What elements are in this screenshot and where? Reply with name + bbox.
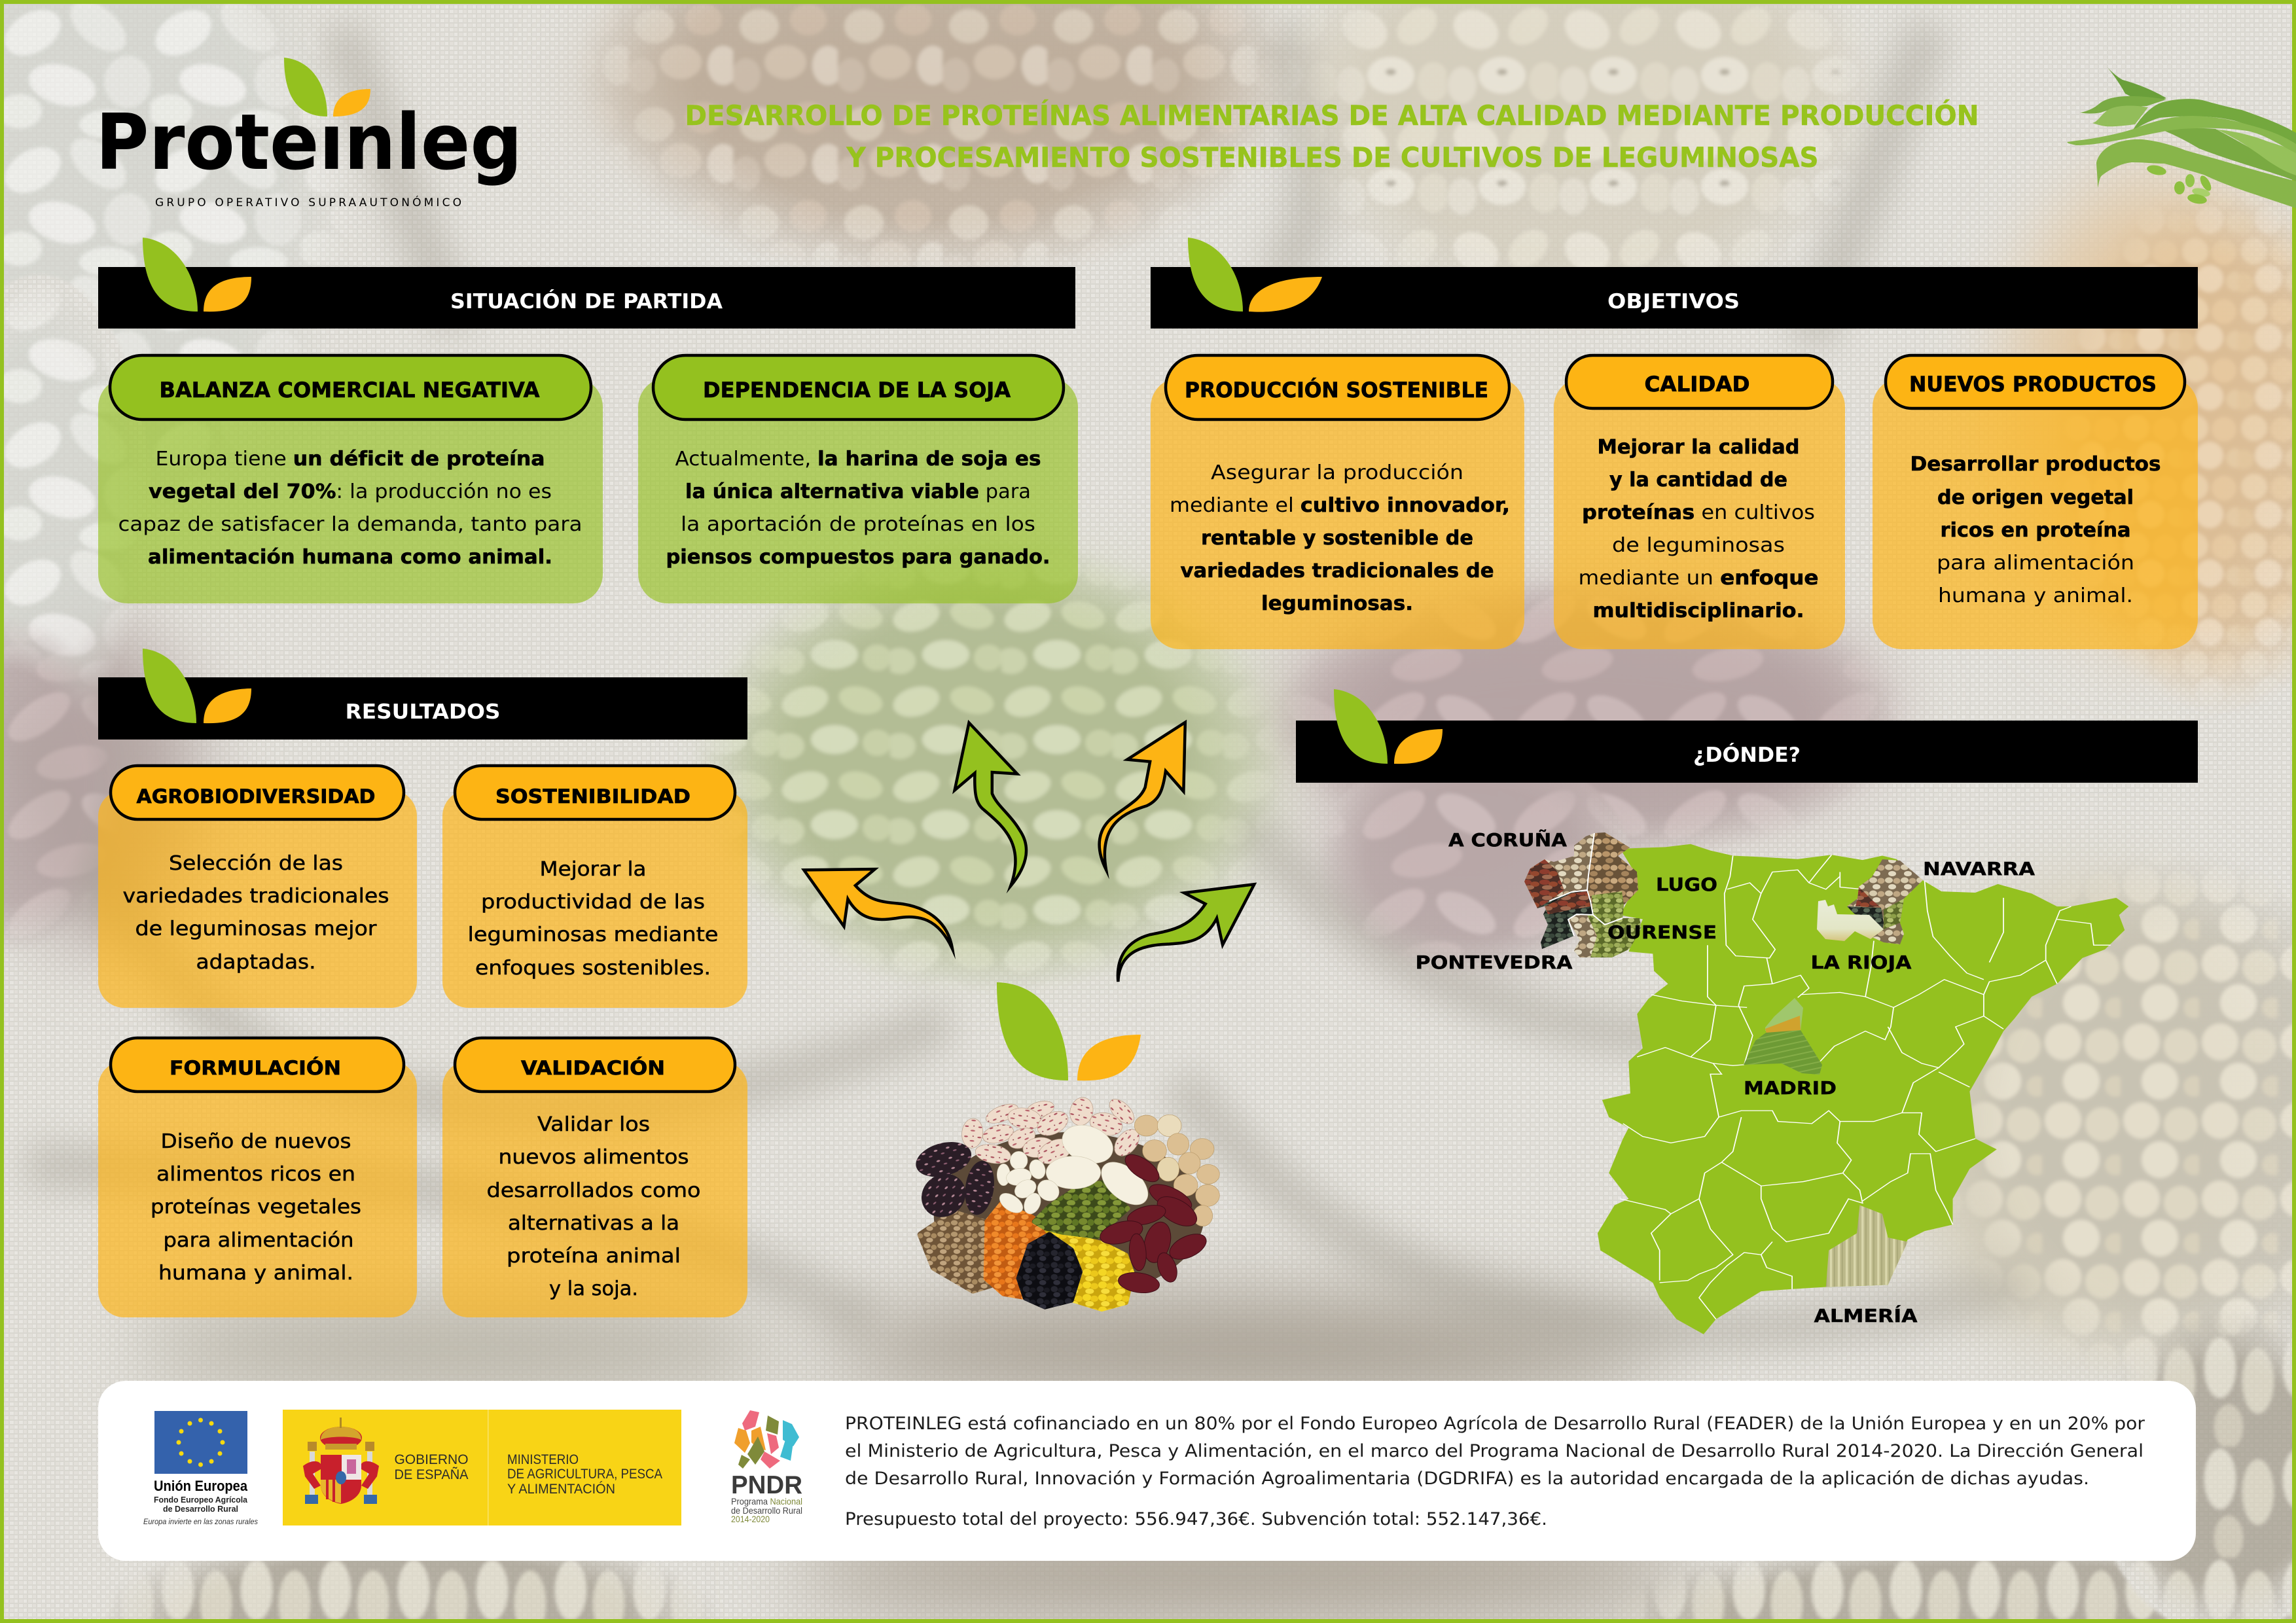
logo: Unión Europea: Unión Europea — [154, 1478, 248, 1494]
card: agrobiodiversidad: adaptadas. — [196, 951, 315, 974]
card: formulación: alimentos ricos en — [156, 1163, 355, 1186]
card: dependencia de la soja: la única alternativa viable para — [685, 480, 1031, 503]
card: producción sostenible — [1151, 355, 1524, 649]
card: nuevos productos: Desarrollar productos — [1910, 453, 2161, 476]
province: Almería — [1826, 1205, 1908, 1287]
map labels: MADRID — [1744, 1077, 1837, 1099]
logo: PNDR: de Desarrollo Rural — [731, 1505, 802, 1516]
province borders in Galicia — [1549, 833, 1623, 936]
card: sostenibilidad — [442, 766, 747, 1008]
province: Lugo — [1587, 832, 1638, 925]
card: agrobiodiversidad: Selección de las — [169, 852, 343, 875]
card: validación — [442, 1038, 747, 1317]
arrow: orange left — [804, 869, 952, 949]
card: calidad: CALIDAD — [1644, 372, 1750, 397]
card: producción sostenible: rentable y sostenible de — [1201, 527, 1473, 550]
card: formulación: proteínas vegetales — [151, 1196, 361, 1219]
card: balanza comercial negativa: alimentación humana como animal. — [148, 546, 552, 569]
card: agrobiodiversidad — [98, 766, 417, 1008]
logo: Gobierno de España: MINISTERIO — [507, 1452, 579, 1467]
panel: dónde — [1296, 689, 2198, 1334]
card: validación: alternativas a la — [508, 1212, 679, 1235]
map of Spain — [1415, 829, 2128, 1334]
card: producción sostenible: PRODUCCIÓN SOSTENIBLE — [1185, 377, 1488, 402]
section header bar: RESULTADOS — [346, 700, 500, 724]
map labels: OURENSE — [1607, 921, 1717, 943]
card: agrobiodiversidad: de leguminosas mejor — [135, 918, 377, 940]
card: agrobiodiversidad: variedades tradicionales — [123, 885, 389, 908]
title: DESARROLLO DE PROTEÍNAS ALIMENTARIAS DE ALTA CALIDAD MEDIANTE PRODUCCIÓN — [685, 99, 1979, 132]
card: sostenibilidad: enfoques sostenibles. — [475, 957, 711, 980]
title: Y PROCESAMIENTO SOSTENIBLES DE CULTIVOS DE LEGUMINOSAS — [846, 141, 1818, 173]
card: calidad: multidisciplinario. — [1593, 599, 1804, 622]
arrows radiating from legumes — [804, 722, 1254, 982]
card: balanza comercial negativa: vegetal del 70% : la producción no es — [149, 480, 552, 503]
card: dependencia de la soja: Actualmente, la harina de soja es — [675, 448, 1041, 471]
card: agrobiodiversidad: AGROBIODIVERSIDAD — [136, 785, 376, 808]
logo: PNDR: PNDR — [731, 1471, 802, 1499]
logo: Unión Europea: de Desarrollo Rural — [163, 1504, 238, 1514]
funding text: Presupuesto total del proyecto: 556.947,36€. Subvención total: 552.147,36€. — [845, 1509, 1547, 1529]
panel: footer funding — [98, 1381, 2196, 1561]
icon: central leaves — [997, 982, 1141, 1080]
card: balanza comercial negativa: capaz de satisfacer la demanda, tanto para — [118, 513, 583, 536]
card: formulación: para alimentación — [164, 1229, 353, 1252]
panel: situación de partida — [98, 238, 1078, 603]
card: calidad: mediante un enfoque — [1579, 567, 1818, 590]
card: dependencia de la soja: la aportación de proteínas en los — [681, 513, 1035, 536]
section header bar — [98, 649, 747, 740]
card: producción sostenible: variedades tradicionales de — [1181, 560, 1494, 582]
logo: Proteinleg: Proteinleg — [96, 97, 522, 187]
logo: Gobierno de España — [283, 1410, 681, 1525]
section header bar: OBJETIVOS — [1607, 290, 1740, 313]
map labels: NAVARRA — [1923, 858, 2035, 880]
icon: green bean pods — [2067, 66, 2296, 208]
logo: Unión Europea — [143, 1411, 258, 1526]
logo: Proteinleg — [96, 58, 522, 209]
card: validación: desarrollados como — [487, 1179, 700, 1202]
card: producción sostenible: Asegurar la producción — [1211, 461, 1463, 484]
card: balanza comercial negativa: Europa tiene un déficit de proteína — [156, 448, 545, 471]
logo: PNDR: Programa Nacional — [731, 1496, 802, 1507]
section header bar — [1151, 238, 2198, 329]
card: nuevos productos: NUEVOS PRODUCTOS — [1909, 372, 2157, 397]
map labels: LA RIOJA — [1810, 952, 1912, 973]
sack folds — [26, 26, 2029, 1329]
funding text: PROTEINLEG está cofinanciado en un 80% por el Fondo Europeo Agrícola de Desarrollo Rural (FEADER) de la Unión Europea y en un 20% por — [845, 1414, 2145, 1434]
card: sostenibilidad: Mejorar la — [539, 858, 647, 881]
logo: Gobierno de España: GOBIERNO — [394, 1452, 469, 1467]
card: validación: nuevos alimentos — [499, 1146, 689, 1169]
funding text: el Ministerio de Agricultura, Pesca y Alimentación, en el marco del Programa Nacional de Desarrollo Rural 2014-2020. La Dirección General — [845, 1441, 2144, 1461]
mainland — [1598, 844, 2128, 1334]
province: Pontevedra — [1537, 891, 1593, 949]
map labels: LUGO — [1656, 874, 1717, 895]
province: Ourense — [1568, 914, 1641, 957]
province: Navarra — [1847, 859, 1923, 944]
province: Madrid — [1744, 998, 1822, 1075]
card: nuevos productos — [1873, 355, 2198, 649]
map labels — [1415, 829, 2035, 1327]
arrow: orange up right — [1100, 722, 1185, 870]
illustration: pile of legumes — [912, 1095, 1219, 1309]
logo: Gobierno de España: Y ALIMENTACIÓN — [507, 1482, 615, 1497]
card: validación: proteína animal — [507, 1245, 681, 1268]
card: sostenibilidad: productividad de las — [481, 891, 705, 914]
logo: Gobierno de España: DE ESPAÑA — [394, 1467, 469, 1482]
card: formulación: Diseño de nuevos — [161, 1130, 351, 1153]
card: nuevos productos: de origen vegetal — [1937, 486, 2134, 509]
card: validación: y la soja. — [549, 1277, 638, 1300]
logo: Proteinleg: GRUPO OPERATIVO SUPRAAUTONÓMICO — [155, 195, 461, 209]
card: formulación: FORMULACIÓN — [170, 1057, 341, 1079]
map labels: A CORUÑA — [1448, 829, 1567, 851]
card: nuevos productos: para alimentación — [1937, 552, 2134, 575]
province: A Coruña — [1524, 833, 1594, 908]
card: validación: Validar los — [537, 1113, 650, 1136]
funding text — [845, 1414, 2145, 1529]
card: formulación — [98, 1038, 417, 1317]
province borders — [1620, 855, 2111, 1319]
card: calidad: y la cantidad de — [1609, 469, 1787, 491]
arrow: green up — [955, 722, 1026, 886]
section header bar — [1296, 689, 2198, 783]
panel: resultados — [98, 649, 747, 1317]
logo: Unión Europea: Fondo Europeo Agrícola — [154, 1495, 248, 1505]
section header bar: ¿DÓNDE? — [1693, 743, 1801, 767]
logo: Gobierno de España: DE AGRICULTURA, PESCA — [507, 1467, 662, 1482]
section header bar — [98, 238, 1075, 329]
section header bar: SITUACIÓN DE PARTIDA — [450, 289, 723, 313]
card: nuevos productos: ricos en proteína — [1940, 519, 2131, 542]
card: sostenibilidad: SOSTENIBILIDAD — [495, 785, 691, 808]
map labels: ALMERÍA — [1814, 1304, 1918, 1327]
funding text: de Desarrollo Rural, Innovación y Formación Agroalimentaria (DGDRIFA) es la autoridad encargada de la aplicación de dichas ayudas. — [845, 1469, 2089, 1489]
card: calidad: Mejorar la calidad — [1597, 436, 1800, 459]
card: calidad: proteínas en cultivos — [1582, 501, 1815, 524]
card: sostenibilidad: leguminosas mediante — [467, 923, 719, 946]
card: dependencia de la soja: DEPENDENCIA DE LA SOJA — [703, 378, 1011, 402]
province: La Rioja — [1817, 900, 1884, 941]
card: calidad — [1554, 355, 1845, 649]
title — [685, 99, 1979, 173]
card: nuevos productos: humana y animal. — [1938, 584, 2133, 607]
card: balanza comercial negativa: BALANZA COMERCIAL NEGATIVA — [160, 378, 540, 402]
logo: PNDR: 2014-2020 — [731, 1514, 770, 1524]
card: calidad: de leguminosas — [1612, 534, 1785, 557]
card: dependencia de la soja — [638, 355, 1078, 603]
card: dependencia de la soja: piensos compuestos para ganado. — [666, 546, 1050, 569]
card: producción sostenible: leguminosas. — [1261, 592, 1413, 615]
card: balanza comercial negativa — [98, 355, 603, 603]
card: validación: VALIDACIÓN — [521, 1057, 665, 1079]
map labels: PONTEVEDRA — [1415, 952, 1573, 973]
arrow: green right — [1118, 884, 1254, 982]
logo: PNDR — [731, 1410, 802, 1524]
icon: coat of arms — [303, 1418, 379, 1504]
logo: Unión Europea: Europa invierte en las zonas rurales — [143, 1517, 258, 1526]
card: producción sostenible: mediante el cultivo innovador, — [1170, 494, 1510, 517]
panel: objetivos — [1151, 238, 2198, 649]
card: formulación: humana y animal. — [158, 1262, 353, 1285]
